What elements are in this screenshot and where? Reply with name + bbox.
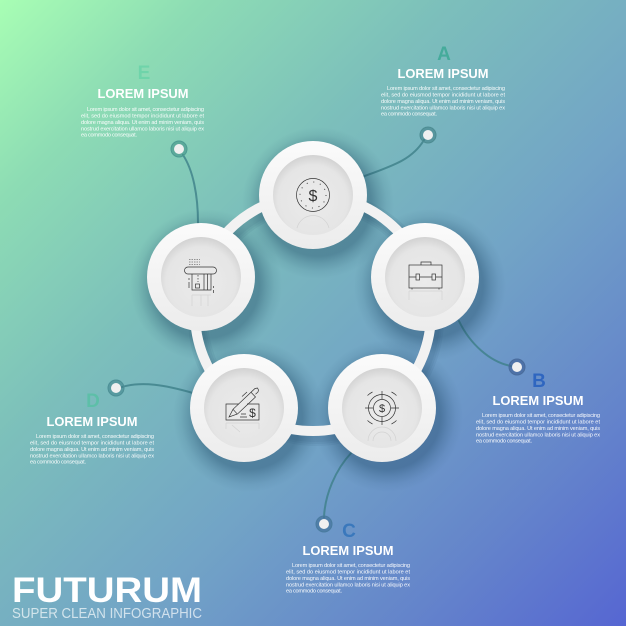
icon: briefcase <box>409 262 442 290</box>
connector: E <box>183 155 198 223</box>
text block: A <box>381 44 505 118</box>
marker: E <box>171 141 187 157</box>
text block: D: ea commodo consequat. <box>30 460 86 466</box>
marker: A <box>420 127 436 143</box>
connector: D <box>122 384 193 393</box>
text block: A: dolore magna aliqua. Ut enim ad minim veniam, quis <box>381 99 505 105</box>
text block: E: Lorem ipsum dolor sit amet, consectetur adipiscing <box>87 107 204 113</box>
text block: D: elit, sed do eiusmod tempor incididunt ut labore et <box>30 440 154 446</box>
ring shadow <box>198 200 434 436</box>
text block: E <box>81 63 204 139</box>
text block: C <box>286 521 410 595</box>
connector: C <box>324 452 352 517</box>
icon reflection <box>368 427 396 441</box>
pentagon ring <box>195 195 431 431</box>
text block: E: LOREM IPSUM <box>98 86 188 101</box>
text block: C: C <box>342 521 356 542</box>
text block: D: LOREM IPSUM <box>46 414 138 429</box>
marker: C <box>316 516 332 532</box>
text block: A: elit, sed do eiusmod tempor incididunt ut labore et <box>381 92 505 98</box>
text block: E: elit, sed do eiusmod tempor incididunt ut labore et <box>81 114 204 120</box>
icon reflection <box>409 291 442 300</box>
title: brand <box>12 571 202 622</box>
text block: D: D <box>86 391 100 412</box>
text block: C: dolore magna aliqua. Ut enim ad minim veniam, quis <box>286 576 410 582</box>
text block: A: A <box>437 44 451 65</box>
text block: C: nostrud exercitation ullamco laboris nisi ut aliquip ex <box>286 582 410 588</box>
icon reflection <box>226 423 259 432</box>
marker: B <box>509 359 525 375</box>
connector: A <box>362 140 424 177</box>
icon: target with dollar: $ <box>379 403 385 415</box>
text block: C: ea commodo consequat. <box>286 589 342 595</box>
text block: E: E <box>138 63 150 84</box>
text block: B: nostrud exercitation ullamco laboris nisi ut aliquip ex <box>476 432 600 438</box>
node: bottom left circle <box>190 354 298 462</box>
text block: D <box>30 391 154 466</box>
text block: B: B <box>532 371 546 392</box>
icon: card in ATM slot <box>184 260 216 293</box>
node: left circle <box>147 223 255 331</box>
connector: B <box>459 321 511 366</box>
text block: C: elit, sed do eiusmod tempor incididunt ut labore et <box>286 570 410 576</box>
text block: A: Lorem ipsum dolor sit amet, consectetur adipiscing <box>387 86 505 92</box>
text block: B: dolore magna aliqua. Ut enim ad minim veniam, quis <box>476 426 600 432</box>
icon: cheque and pen: $ <box>249 406 256 420</box>
text block: C: Lorem ipsum dolor sit amet, consectetur adipiscing <box>292 563 410 569</box>
text block: B: Lorem ipsum dolor sit amet, consectetur adipiscing <box>482 413 600 419</box>
title: brand: SUPER CLEAN INFOGRAPHIC <box>12 606 202 622</box>
text block: E: nostrud exercitation ullamco laboris nisi ut aliquip ex <box>81 126 204 132</box>
text block: A: LOREM IPSUM <box>398 66 488 81</box>
text block: E: ea commodo consequat. <box>81 133 137 139</box>
text block: C: LOREM IPSUM <box>302 543 394 558</box>
icon reflection <box>297 216 329 228</box>
text block: D: dolore magna aliqua. Ut enim ad minim veniam, quis <box>30 447 154 453</box>
title: brand: FUTURUM <box>12 571 202 610</box>
node: top circle <box>259 141 367 249</box>
text block: B: LOREM IPSUM <box>492 393 584 408</box>
marker: D <box>108 380 124 396</box>
node: right circle <box>371 223 479 331</box>
text block: D: Lorem ipsum dolor sit amet, consectetur adipiscing <box>36 434 154 440</box>
text block: B <box>476 371 600 445</box>
text block: E: dolore magna aliqua. Ut enim ad minim veniam, quis <box>81 120 204 126</box>
icon reflection <box>192 295 211 306</box>
text block: A: ea commodo consequat. <box>381 112 437 118</box>
circle shadows <box>130 127 506 492</box>
node: bottom right circle <box>328 354 436 462</box>
icon: dollar coin: $ <box>309 188 318 205</box>
text block: B: ea commodo consequat. <box>476 439 532 445</box>
text block: A: nostrud exercitation ullamco laboris nisi ut aliquip ex <box>381 105 505 111</box>
text block: D: nostrud exercitation ullamco laboris nisi ut aliquip ex <box>30 453 154 459</box>
text block: B: elit, sed do eiusmod tempor incididunt ut labore et <box>476 420 600 426</box>
